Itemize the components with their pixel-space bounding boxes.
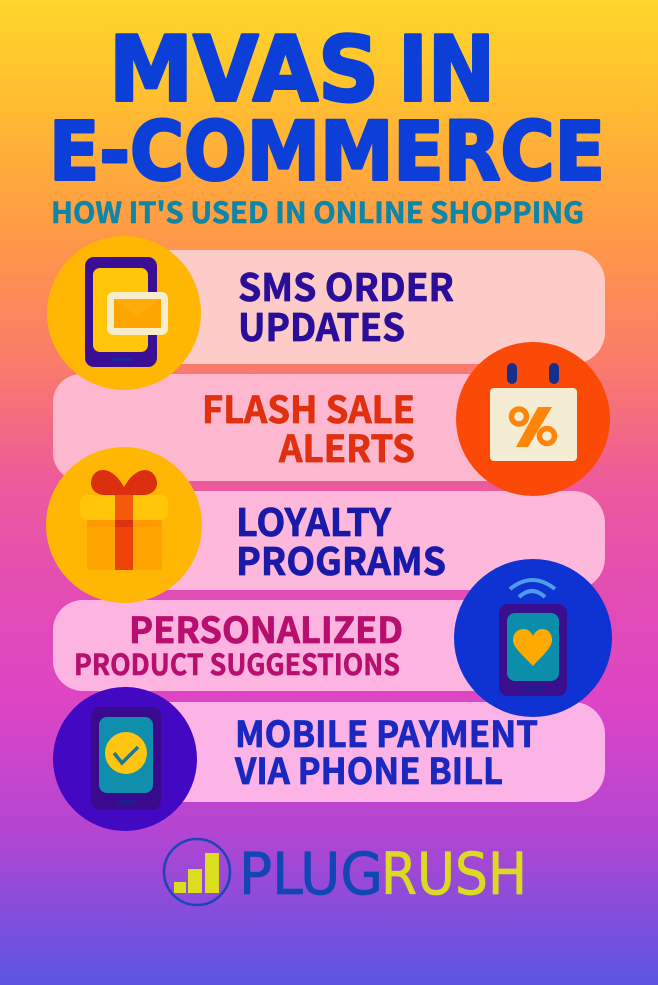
label: loyalty programs: PROGRAMS <box>236 531 446 586</box>
label: mobile payment via phone bill: MOBILE PAYMENT <box>235 706 538 758</box>
logo: PlugRush <box>164 839 527 908</box>
label: mobile payment via phone bill: VIA PHONE BILL <box>234 743 503 795</box>
icon: phone with checkmark <box>53 687 197 831</box>
label: SMS order updates: UPDATES <box>238 297 405 352</box>
panel: SMS order updates <box>120 250 605 364</box>
label: product suggestions: PRODUCT SUGGESTIONS <box>74 642 400 684</box>
subtitle: HOW IT'S USED IN ONLINE SHOPPING <box>51 190 584 232</box>
label: SMS order updates: SMS ORDER <box>238 257 454 312</box>
label: loyalty programs: LOYALTY <box>236 492 392 547</box>
label: personalized: PERSONALIZED <box>129 602 403 654</box>
icon: calendar with percent <box>456 342 610 496</box>
logo icon <box>164 839 230 905</box>
label: flash sale alerts: ALERTS <box>278 419 415 473</box>
icon: gift box <box>46 447 202 603</box>
panel: mobile payment <box>120 702 605 802</box>
icon: phone with envelope <box>47 236 201 390</box>
title: IN <box>398 18 495 122</box>
panel: personalized product suggestions <box>53 600 523 691</box>
title: E-COMMERCE <box>49 106 605 200</box>
panel: flash sale alerts <box>53 374 523 481</box>
title <box>49 18 605 200</box>
logo wordmark: PLUG <box>239 840 383 908</box>
label: flash sale alerts: FLASH SALE <box>202 380 415 434</box>
title: MVAS <box>109 18 379 122</box>
icon: phone with heart and signal <box>454 559 612 717</box>
panel: loyalty programs <box>120 491 605 590</box>
logo wordmark: RUSH <box>381 840 527 908</box>
